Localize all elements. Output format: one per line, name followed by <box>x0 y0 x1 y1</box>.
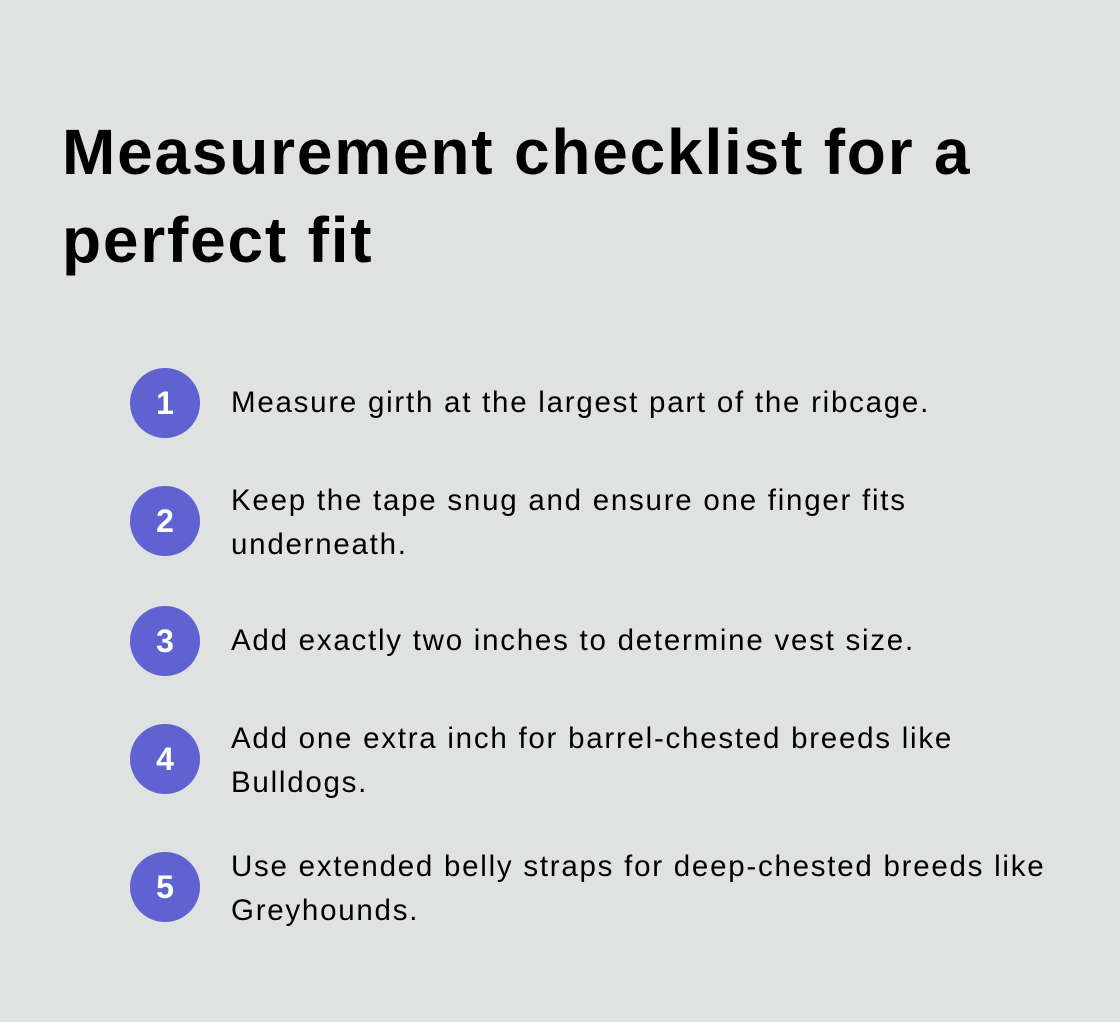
item 2: underneath. <box>231 528 408 561</box>
item 3 <box>130 606 915 676</box>
title <box>62 116 971 276</box>
item 1: 1 <box>156 385 174 421</box>
item 4 <box>130 722 953 799</box>
item 2: 2 <box>156 503 174 539</box>
title: perfect fit <box>62 204 373 276</box>
item 4: Bulldogs. <box>231 766 368 799</box>
item 5: Greyhounds. <box>231 894 419 927</box>
item 4: Add one extra inch for barrel-chested breeds like <box>231 722 953 755</box>
title: Measurement checklist for a <box>62 116 971 188</box>
item 2 <box>130 484 907 561</box>
item 3: Add exactly two inches to determine vest size. <box>231 624 915 657</box>
item 5 <box>130 850 1045 927</box>
item 2: Keep the tape snug and ensure one finger fits <box>231 484 907 517</box>
item 4: 4 <box>156 741 174 777</box>
item 3: 3 <box>156 623 174 659</box>
item 5: 5 <box>156 869 174 905</box>
item 1 <box>130 368 930 438</box>
item 5: Use extended belly straps for deep-chested breeds like <box>231 850 1045 883</box>
item 1: Measure girth at the largest part of the ribcage. <box>231 386 930 419</box>
